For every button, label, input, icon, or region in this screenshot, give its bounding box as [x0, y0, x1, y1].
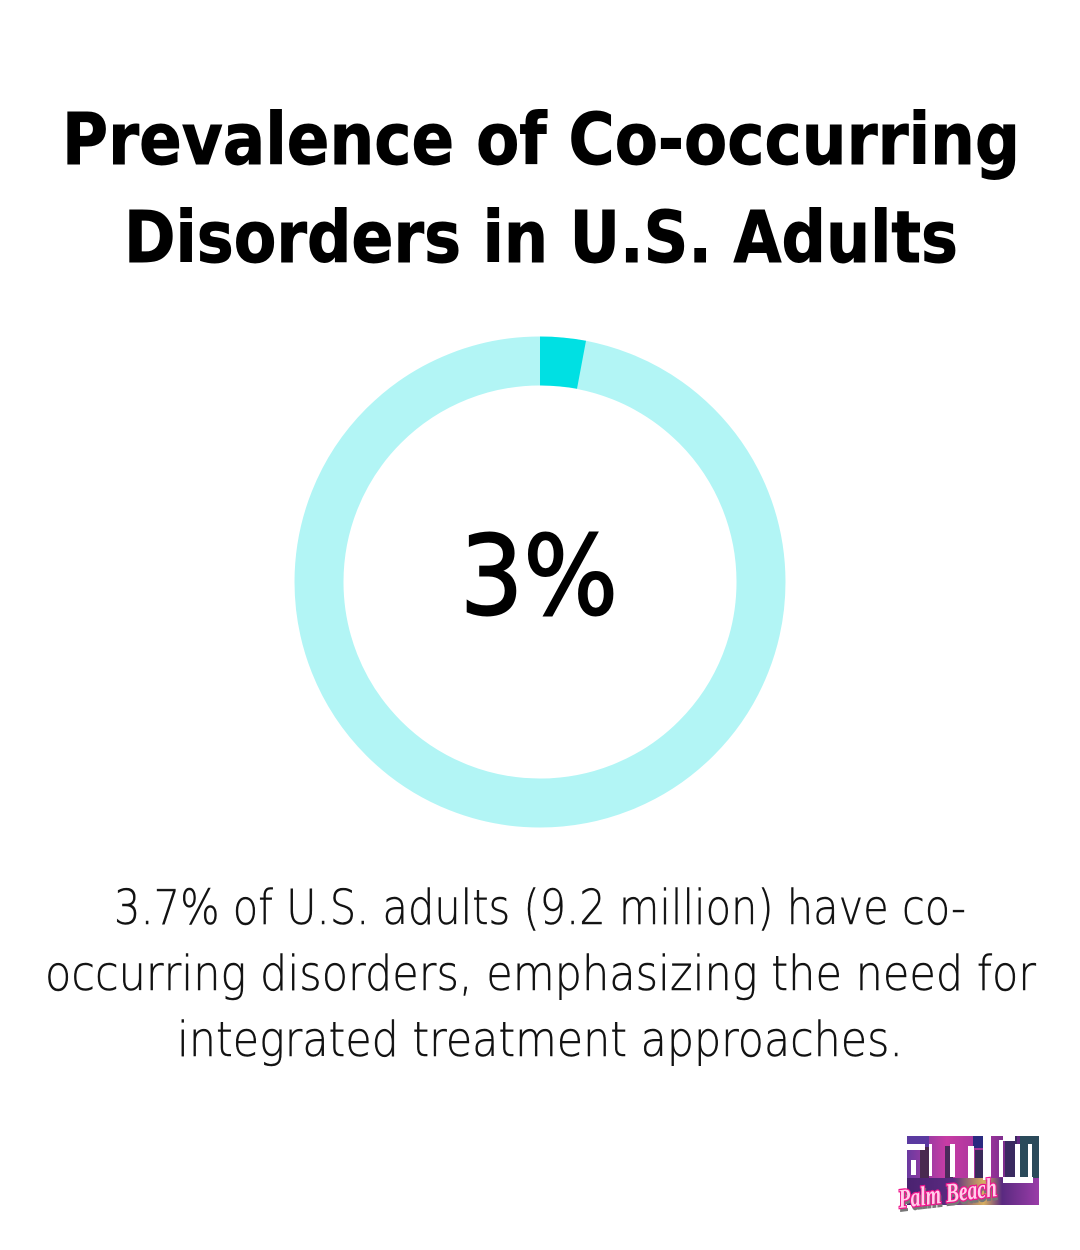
logo script text: Palm Beach	[897, 1175, 999, 1217]
logo: Amity Palm Beach	[896, 1134, 1039, 1217]
description text: 3.7% of U.S. adults (9.2 million) have co-	[114, 880, 966, 936]
donut chart	[319, 336, 761, 803]
center value: 3%	[460, 512, 618, 640]
description text	[45, 880, 1036, 1068]
title: Disorders in U.S. Adults	[124, 196, 958, 279]
logo letter gaps	[907, 1134, 1033, 1183]
title	[62, 98, 1020, 279]
logo script text: Palm Beach	[896, 1172, 998, 1214]
description text: integrated treatment approaches.	[177, 1012, 903, 1068]
logo script text	[896, 1172, 999, 1217]
highlighted segment: 3%	[540, 336, 586, 389]
